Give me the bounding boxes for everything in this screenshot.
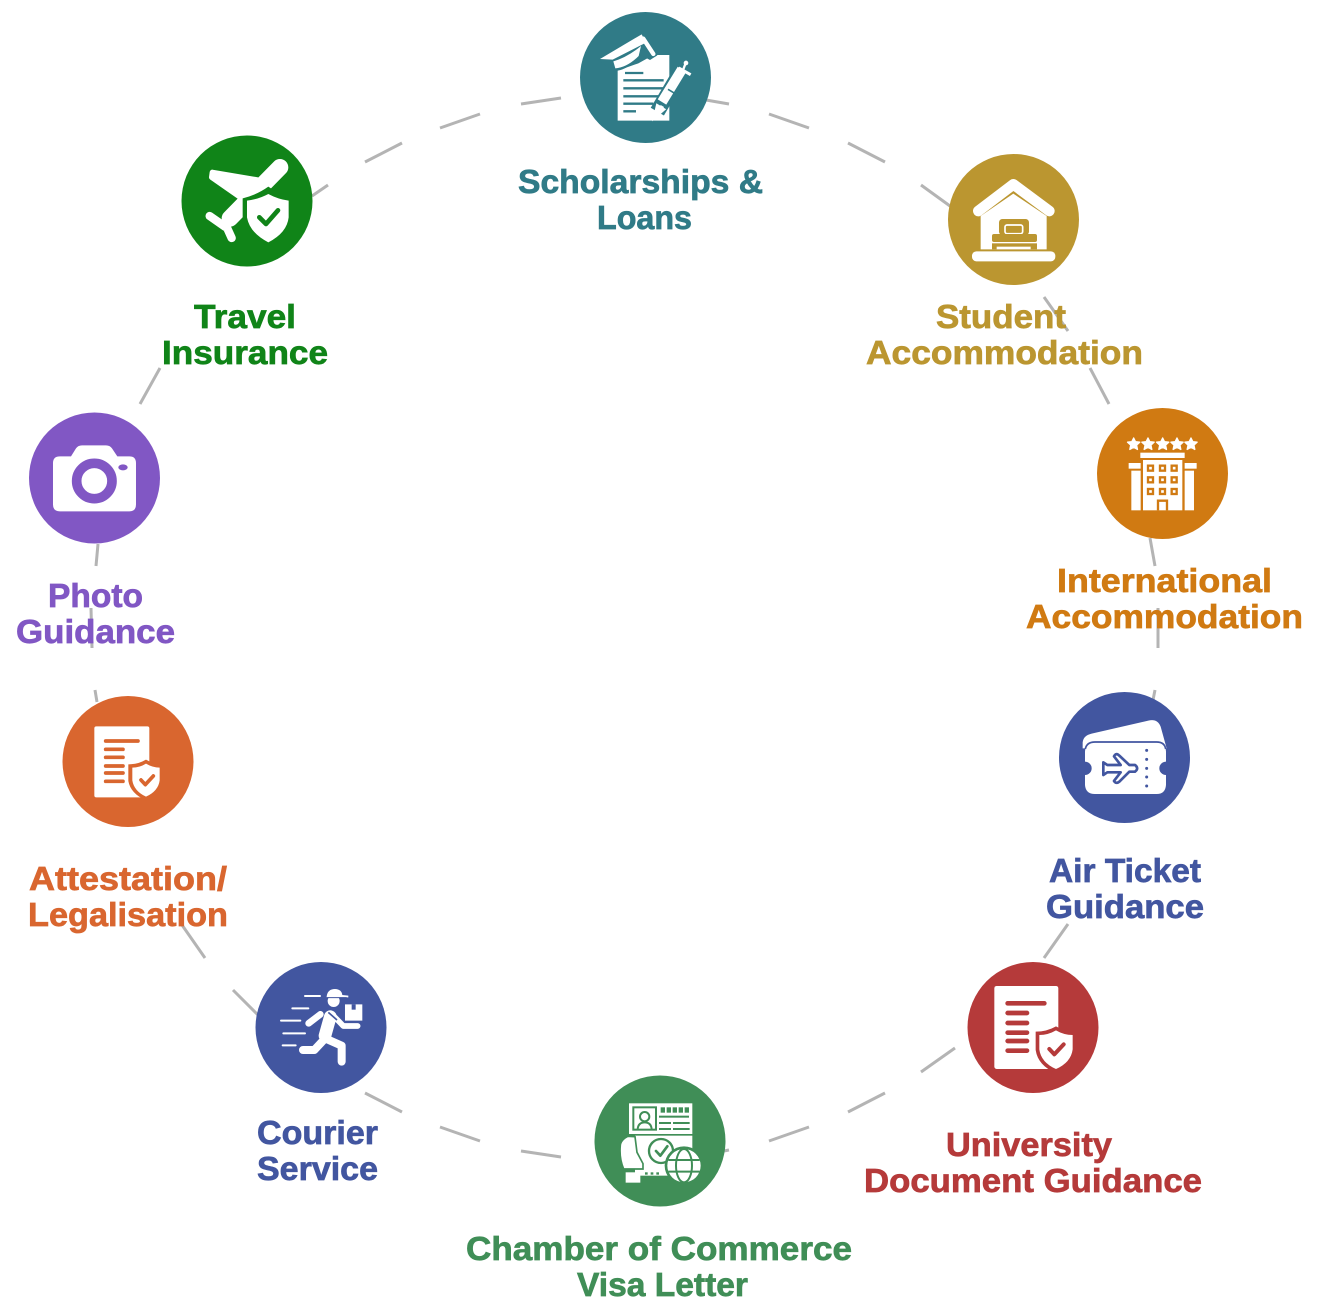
- item: University Document Guidance: [864, 962, 1202, 1199]
- icon: running courier: [256, 962, 386, 1093]
- label: [257, 1114, 378, 1187]
- item: Air Ticket Guidance: [1046, 692, 1204, 925]
- label: [864, 1126, 1202, 1199]
- label: Air Ticket: [1049, 852, 1201, 889]
- label: University: [946, 1126, 1113, 1163]
- label: Attestation/: [29, 860, 227, 897]
- icon: plane with shield: [182, 136, 312, 266]
- label: [28, 860, 228, 933]
- label: Travel: [194, 298, 296, 335]
- label: Accommodation: [866, 334, 1143, 371]
- label: Legalisation: [28, 896, 228, 933]
- item: Chamber of Commerce Visa Letter: [466, 1076, 852, 1302]
- icon: house with bed: [948, 154, 1079, 285]
- icon: camera: [29, 412, 160, 544]
- label: Student: [936, 298, 1066, 335]
- label: [1046, 852, 1204, 925]
- label: Service: [257, 1150, 378, 1187]
- label: [162, 298, 328, 371]
- label: Scholarships &: [518, 163, 763, 200]
- label: Photo: [48, 577, 143, 614]
- label: Document Guidance: [864, 1162, 1202, 1199]
- label: Visa Letter: [577, 1266, 748, 1302]
- label: Chamber of Commerce: [466, 1230, 852, 1267]
- label: Loans: [597, 199, 692, 236]
- label: Accommodation: [1026, 598, 1303, 635]
- label: [1026, 562, 1303, 635]
- label: Guidance: [16, 613, 175, 650]
- item: Travel Insurance: [162, 136, 328, 371]
- item: Photo Guidance: [16, 412, 175, 650]
- item: Attestation/Legalisation: [28, 696, 228, 933]
- label: Guidance: [1046, 888, 1204, 925]
- icon: five star hotel: [1097, 408, 1228, 539]
- label: [866, 298, 1143, 371]
- label: [466, 1230, 852, 1302]
- label: [518, 163, 763, 236]
- icon: visa card, hand and globe: [594, 1076, 726, 1206]
- label: International: [1057, 562, 1272, 599]
- label: [16, 577, 175, 650]
- item: Student Accommodation: [866, 154, 1143, 371]
- label: Insurance: [162, 334, 328, 371]
- item: International Accommodation: [1026, 408, 1303, 635]
- label: Courier: [257, 1114, 378, 1151]
- item: Courier Service: [256, 962, 386, 1187]
- icon: scholarship document and pen: [580, 12, 711, 143]
- icon: plane ticket: [1059, 692, 1190, 823]
- icon: document with shield: [968, 962, 1098, 1093]
- icon: document with shield: [62, 696, 194, 827]
- item: Scholarships & Loans: [518, 12, 763, 236]
